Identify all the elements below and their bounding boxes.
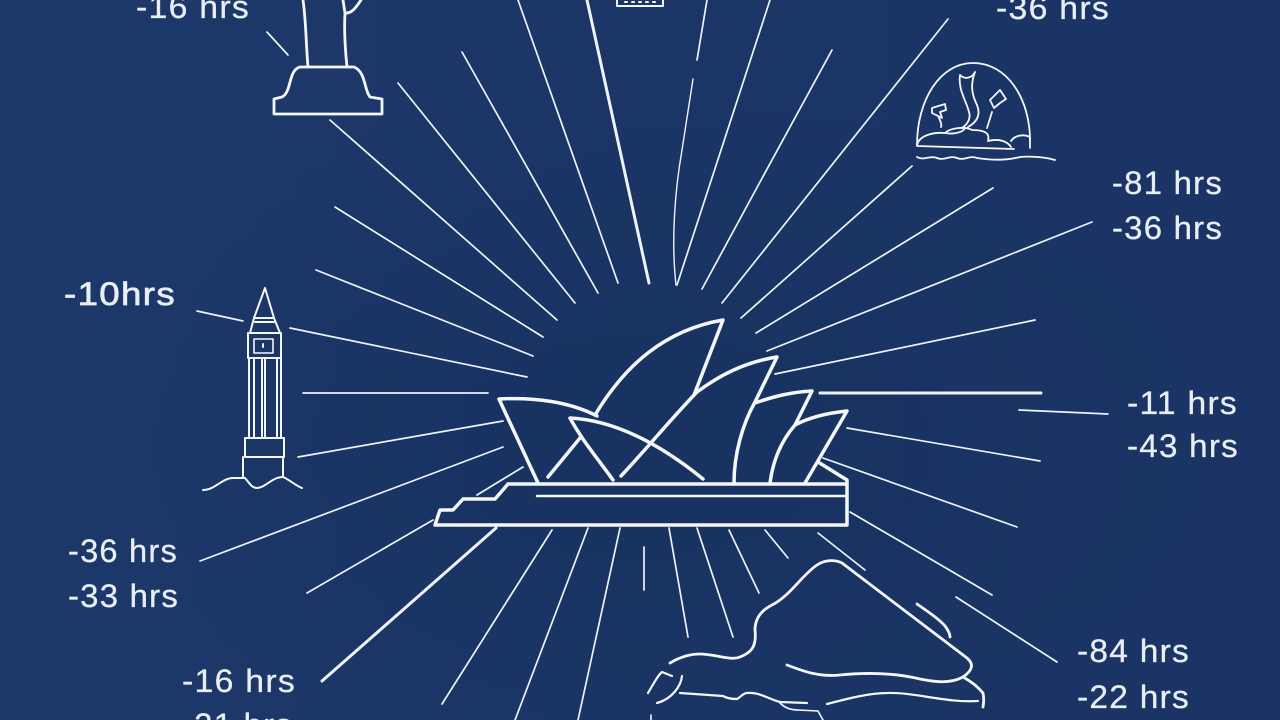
podium inner line xyxy=(537,495,847,497)
sail: fifth xyxy=(795,411,847,483)
label: -36 hrs right: -36 hrs xyxy=(1112,210,1223,246)
lower contour xyxy=(827,693,978,704)
shoreline lower xyxy=(780,703,823,720)
small rock right xyxy=(657,676,682,703)
right slope xyxy=(963,677,984,707)
plinth xyxy=(243,457,283,478)
small rock left xyxy=(648,672,672,693)
clock housing xyxy=(248,333,281,358)
shaft xyxy=(249,358,281,438)
sail: second tallest xyxy=(621,357,777,483)
podium base xyxy=(435,462,847,525)
stub xyxy=(650,715,652,720)
label: -16 hrs bottom left: -16 hrs xyxy=(182,663,296,699)
label: -36 hrs left: -36 hrs xyxy=(68,533,178,569)
small palm right xyxy=(987,90,1006,128)
label: -11 hrs: -11 hrs xyxy=(1127,385,1238,421)
label: -33 hrs: -33 hrs xyxy=(68,578,179,614)
waves xyxy=(203,477,302,490)
ridge shadow xyxy=(917,604,950,637)
roof band xyxy=(250,318,280,333)
small palm left xyxy=(932,104,946,127)
label: -84 hrs: -84 hrs xyxy=(1077,633,1190,669)
icon: island globe xyxy=(917,63,1055,160)
central plume xyxy=(960,72,979,128)
spire xyxy=(254,288,274,318)
sail: far left xyxy=(499,399,597,483)
foreground shoreline xyxy=(680,693,807,703)
sail: fourth xyxy=(755,391,812,483)
label: -43 hrs: -43 hrs xyxy=(1127,428,1239,464)
sail: lower front arc xyxy=(570,418,703,480)
label: -22 hrs: -22 hrs xyxy=(1077,679,1190,715)
clock face xyxy=(254,339,273,353)
radiating rays xyxy=(197,0,1108,720)
water waves xyxy=(917,157,1055,160)
icon: Big Ben xyxy=(203,288,302,490)
island clumps xyxy=(917,128,1030,149)
icon: mountain / uluru landform xyxy=(648,561,984,720)
label: -81 hrs: -81 hrs xyxy=(1112,165,1223,201)
icon: top centre tower base xyxy=(617,0,663,6)
icon: Statue of Liberty xyxy=(274,0,382,114)
dome xyxy=(917,63,1030,145)
main ridge xyxy=(670,561,972,682)
icon: Sydney Opera House xyxy=(435,320,847,525)
sail: tallest xyxy=(548,320,723,477)
label: -10 hrs: -10hrs xyxy=(64,276,176,312)
lower block xyxy=(245,438,284,457)
